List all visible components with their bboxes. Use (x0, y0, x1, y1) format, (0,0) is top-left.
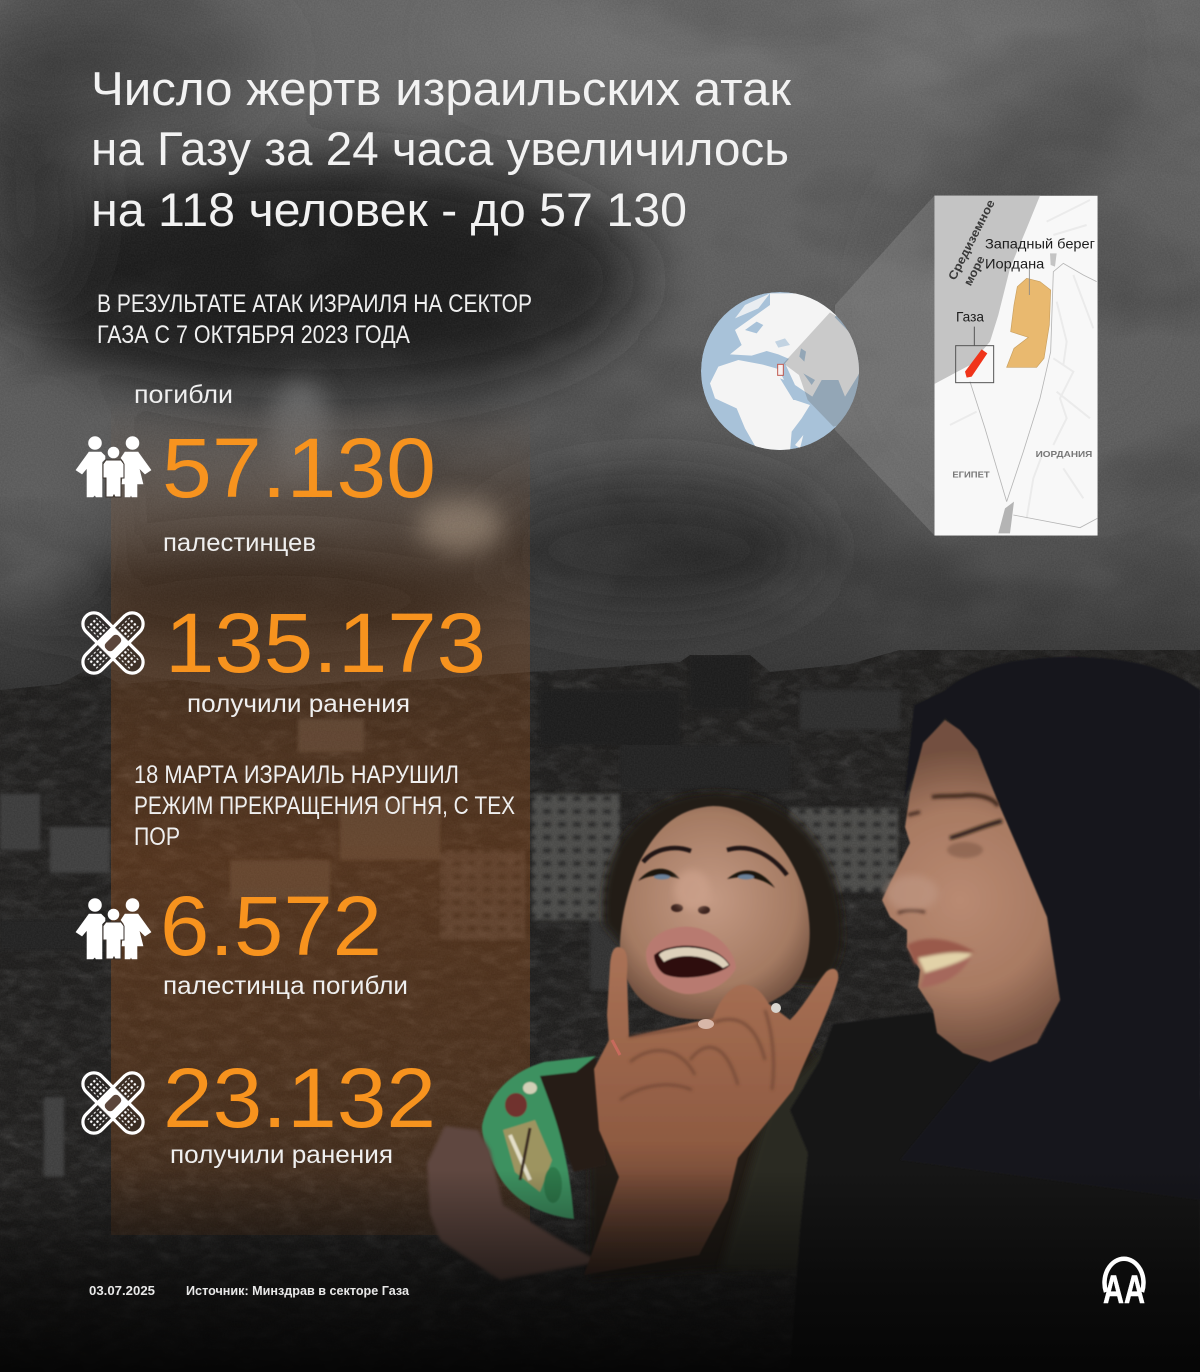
stat: wounded 135.173 (78, 596, 486, 718)
stat: killed 6.572: 6.572 (160, 879, 382, 973)
subheading: since 18 March: 18 МАРТА ИЗРАИЛЬ НАРУШИЛ (134, 761, 459, 789)
sleeve: green patterned dress (482, 1056, 606, 1219)
stat: killed 6.572 (76, 879, 408, 1000)
woman's face (882, 720, 1060, 1062)
Gaza strip (965, 349, 987, 378)
logo: Anadolu Agency: AA (1103, 1268, 1145, 1312)
map labels: Западный берег (985, 235, 1095, 251)
map: Gaza and West Bank (934, 196, 1098, 536)
Asia (785, 317, 859, 396)
dark body of the girl (590, 1040, 835, 1280)
girl's hands (584, 947, 838, 1275)
title: Число жертв израильских атак (91, 62, 791, 115)
shaded wedge (784, 312, 859, 426)
icon: family (76, 898, 151, 959)
stat: wounded 23.132: получили ранения (170, 1141, 393, 1169)
subheading: since 7 October: ГАЗА С 7 ОКТЯБРЯ 2023 ГОДА (97, 321, 410, 349)
photo: girl crying (427, 792, 845, 1280)
finger details (620, 1010, 774, 1100)
stat: killed 6.572: палестинца погибли (163, 972, 408, 1000)
photo: woman in black hijab (790, 657, 1200, 1372)
stat: wounded 135.173: получили ранения (187, 690, 410, 718)
icon: family (76, 436, 151, 497)
hijab (900, 657, 1200, 1200)
stat: wounded 135.173: 135.173 (165, 596, 486, 690)
footer: date and source (89, 1284, 410, 1298)
subheading: since 18 March: РЕЖИМ ПРЕКРАЩЕНИЯ ОГНЯ, С ТЕХ (134, 792, 515, 820)
subheading: since 7 October: В РЕЗУЛЬТАТЕ АТАК ИЗРАИЛЯ НА СЕКТОР (97, 290, 532, 318)
locator beam from globe to map (835, 196, 934, 535)
logo: Anadolu Agency (1103, 1259, 1145, 1312)
globe locator (701, 292, 868, 452)
garment below the face (790, 1012, 1200, 1372)
stat: wounded 23.132: 23.132 (163, 1051, 436, 1145)
West Bank (1007, 278, 1051, 367)
map: Gaza and West Bank: ИОРДАНИЯ (1036, 449, 1092, 459)
Madagascar (795, 435, 803, 448)
title (91, 62, 791, 236)
girl's features (638, 848, 787, 994)
woman's hand on girl's arm (427, 1126, 600, 1280)
map: Gaza and West Bank: море (961, 253, 988, 288)
sea (934, 196, 1040, 384)
subheading: since 18 March: ПОР (134, 823, 180, 851)
title: на 118 человек - до 57 130 (91, 183, 687, 236)
icon: bandage (78, 1068, 148, 1138)
map labels (956, 235, 1095, 325)
Europe and Russia (730, 293, 838, 360)
map labels: Газа (956, 309, 984, 325)
stat: killed 57.130 (76, 381, 436, 557)
city skyline and buildings (0, 650, 1200, 1258)
subheading: since 18 March (134, 761, 515, 851)
girl's hair (603, 792, 843, 985)
seas (745, 322, 815, 400)
map: Gaza and West Bank: Средиземное (945, 197, 998, 282)
girl's face (620, 806, 810, 1019)
stat: killed 57.130: палестинцев (163, 529, 316, 557)
relief and borders (950, 200, 1093, 518)
stat: killed 57.130: 57.130 (162, 421, 436, 515)
map: Gaza and West Bank: ЕГИПЕТ (952, 469, 990, 479)
stat: wounded 23.132 (78, 1051, 436, 1169)
footer: date and source: Источник: Минздрав в секторе Газа (186, 1284, 410, 1298)
woman's features (898, 795, 1002, 988)
stat: killed 57.130: погибли (134, 381, 233, 409)
orange translucent panel (111, 400, 530, 1235)
icon: bandage (78, 608, 148, 678)
Africa (710, 360, 810, 452)
title: на Газу за 24 часа увеличилось (91, 122, 789, 175)
footer: date and source: 03.07.2025 (89, 1284, 155, 1298)
subheading: since 7 October (97, 290, 532, 349)
map labels: Иордана (985, 255, 1045, 271)
